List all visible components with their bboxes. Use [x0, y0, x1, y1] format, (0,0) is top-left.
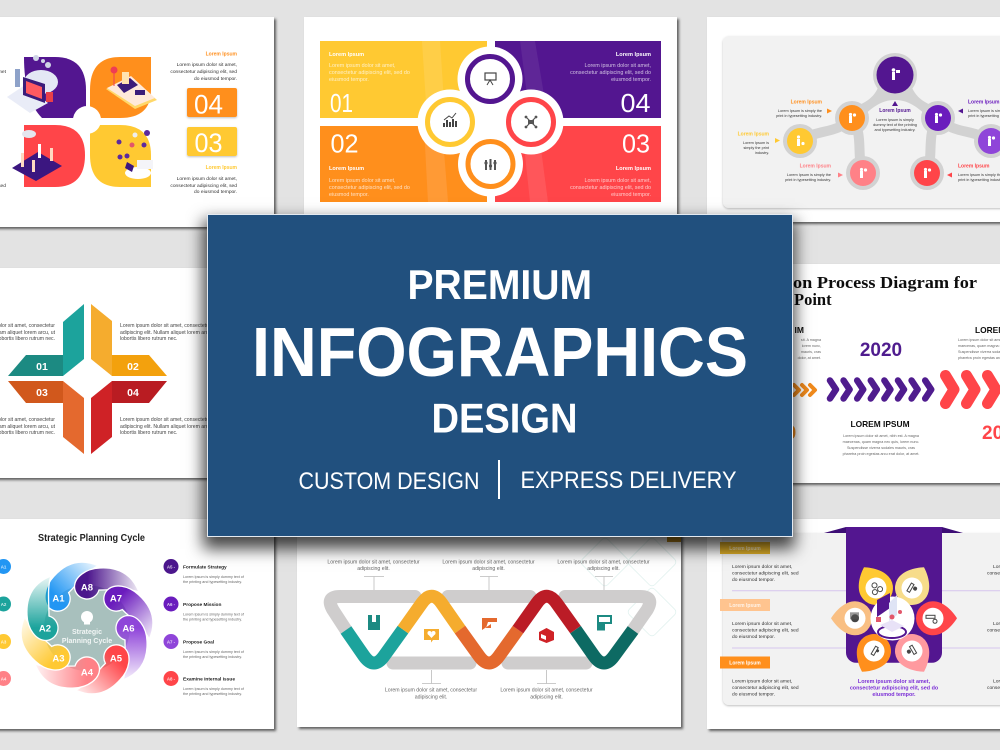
- label: purple: [958, 100, 1000, 118]
- quadrant red: [495, 126, 661, 202]
- label: pink: Lorem Ipsum: [800, 164, 832, 170]
- quadrant red: Lorem ipsum dolor sit amet,: [584, 178, 651, 184]
- node: red: [910, 156, 944, 190]
- year fragments: 20: [775, 423, 796, 444]
- heading: Strategic Planning Cycle: [38, 533, 146, 544]
- list item A8: [164, 671, 245, 696]
- heading top left fragment: lorem nunc,: [802, 344, 821, 348]
- label: pink: Lorem Ipsum is simply the: [787, 173, 831, 177]
- node: top: [873, 53, 917, 97]
- caption: consectetur adipiscing elit, sed do: [850, 686, 939, 692]
- label: gold: [720, 542, 799, 583]
- subheading: custom design: CUSTOM DESIGN: [298, 468, 480, 495]
- card background: [297, 525, 681, 727]
- segment A8: A8: [81, 582, 93, 594]
- label: peach: [720, 599, 799, 640]
- list item A6: A6 -: [167, 602, 176, 607]
- node: yellow: [783, 124, 817, 158]
- label: gold: consectetur adipiscing elit, sed: [732, 570, 799, 576]
- panel: chevron process slide: [740, 264, 1000, 483]
- list item A6: [164, 596, 245, 622]
- orange chevrons: [794, 385, 815, 395]
- list item A6: Lorem Ipsum is simply dummy text of: [183, 612, 245, 616]
- card background: [0, 519, 274, 729]
- text block right bottom: do eiusmod tempor.: [194, 189, 237, 195]
- segment A5: [71, 640, 138, 707]
- clipped list markers: A2: [1, 602, 7, 607]
- quadrant yellow: [320, 41, 487, 118]
- box 04: 04: [194, 90, 223, 120]
- orange leaf with sofa illustration: [90, 57, 157, 118]
- quadrant red: eiusmod tempor.: [611, 192, 651, 198]
- quadrant orange: Lorem ipsum dolor sit amet,: [329, 178, 396, 184]
- heading top left fragment: sit. A magna: [801, 338, 822, 342]
- decorative pale diamonds and corner tab: [580, 537, 681, 637]
- divider: [498, 460, 500, 499]
- clipped list markers: [0, 559, 11, 686]
- leader lines and text bottom 2: adipiscing elit.: [530, 694, 563, 700]
- text top left: [0, 323, 56, 342]
- box 03: [187, 127, 237, 158]
- list item A6: the printing and typesetting industry.: [183, 618, 242, 622]
- quadrant red: consectetur adipiscing elit, sed do: [570, 185, 651, 191]
- label: orange: Lorem Ipsum: [729, 660, 761, 666]
- list item A8: Lorem Ipsum is simply dummy text of: [183, 687, 245, 691]
- quadrant red: 03: [622, 128, 650, 158]
- text block right top: [170, 52, 238, 82]
- connectors: [800, 82, 991, 173]
- leader lines and text top 3: [557, 560, 650, 590]
- label: orange: consectetur adipiscing elit, sed: [732, 685, 799, 691]
- ribbon 04: [91, 381, 167, 454]
- text block right bottom: [170, 165, 238, 195]
- card background: [0, 17, 274, 227]
- leader lines and text bottom 2: Lorem ipsum dolor sit amet, consectetur: [500, 688, 593, 694]
- ring: network icon: [508, 100, 554, 144]
- segment A3: [8, 612, 75, 679]
- heading top left fragment: IM: [795, 325, 804, 335]
- quadrant purple: [495, 41, 661, 118]
- label: yellow: Lorem Ipsum is: [743, 141, 769, 145]
- subheading: express delivery: EXPRESS DELIVERY: [520, 467, 736, 494]
- text bottom left: [0, 417, 56, 436]
- icon: banknote: [597, 615, 612, 630]
- segment A6: A6: [122, 624, 135, 634]
- quadrant orange: eiusmod tempor.: [329, 192, 369, 198]
- leader lines and text bottom 1: Lorem ipsum dolor sit amet, consectetur: [385, 688, 477, 694]
- wheel centre label with head icon: Planning Cycle: [62, 638, 112, 645]
- wheel centre label with head icon: [62, 611, 112, 645]
- purple chevrons: [830, 380, 931, 398]
- label: yellow: [738, 132, 780, 155]
- petal top-right: [889, 559, 939, 611]
- heading top left fragment: dolor, at amet.: [798, 356, 821, 360]
- text top right: Lorem ipsum dolor sit amet, consectetur: [120, 323, 211, 329]
- node: purple: [921, 101, 955, 135]
- red leaf with phone illustration: [12, 125, 85, 187]
- segment A2: [27, 576, 58, 640]
- leader lines and text top 2: [442, 560, 535, 590]
- segment A4: A4: [81, 668, 94, 678]
- inner grey panel: [723, 533, 1000, 705]
- label: orange: [720, 656, 799, 698]
- list item A5: A5 -: [167, 564, 176, 570]
- quadrant red: Lorem Ipsum: [616, 166, 651, 172]
- inner grey panel: [723, 36, 1000, 208]
- label: centre: [873, 101, 917, 132]
- leader lines and text top 1: Lorem ipsum dolor sit amet, consectetur: [327, 560, 420, 566]
- leader lines and text top 2: adipiscing elit.: [472, 566, 505, 572]
- icon: heart bubble: [424, 629, 439, 642]
- list item A6: Propose Mission: [183, 602, 221, 608]
- quadrant purple: eiusmod tempor.: [611, 77, 651, 83]
- text block right top: Lorem ipsum dolor sit amet,: [177, 62, 237, 68]
- card background: [0, 268, 290, 478]
- list item A7: Propose Goal: [183, 640, 214, 646]
- title: Point: [794, 290, 832, 309]
- ring: people icon: [468, 142, 513, 186]
- leader lines and text top 1: adipiscing elit.: [357, 566, 390, 572]
- text top right: [120, 323, 219, 342]
- petal right: [916, 601, 957, 635]
- panel: node tree slide: [707, 17, 1000, 222]
- label: centre: Lorem Ipsum: [879, 108, 911, 114]
- text bottom right: Lorem ipsum dolor sit amet, consectetur: [120, 417, 211, 423]
- label: gold: Lorem Ipsum: [729, 546, 761, 552]
- text block top right: [958, 325, 1000, 360]
- title: [793, 273, 977, 309]
- card background: [740, 264, 1000, 483]
- card background: [707, 519, 1000, 729]
- label: peach: Lorem ipsum dolor sit amet,: [732, 621, 792, 627]
- text block right top: consectetur adipiscing elit, sed: [170, 69, 237, 75]
- panel: strategic planning cycle slide: [0, 519, 274, 729]
- label: yellow: Lorem Ipsum: [738, 132, 770, 138]
- segment A5: A5: [110, 654, 123, 664]
- quadrant yellow: Lorem Ipsum: [329, 52, 364, 58]
- clipped list markers: A3: [1, 640, 7, 644]
- quadrant purple: Lorem Ipsum: [616, 52, 651, 58]
- text bottom right: adipiscing elit. Nullam aliquet lorem arcu, ut: [120, 424, 219, 430]
- centre isometric illustration: [870, 593, 914, 640]
- text bottom right: [120, 417, 219, 436]
- segment A8: [74, 568, 139, 599]
- label: orange: print in typesetting industry.: [776, 114, 822, 118]
- list item A7: the printing and typesetting industry.: [183, 655, 242, 659]
- text block lorem ipsum: Suspendisse viverra sodales mauris, cras: [847, 446, 915, 450]
- panel: zigzag chain slide: [297, 525, 681, 727]
- panel: four quadrants slide: [304, 17, 677, 222]
- grey links: [330, 596, 650, 663]
- text bottom right: lobortis libero rutrum nec.: [120, 430, 177, 436]
- list item A5: the printing and typesetting industry.: [183, 580, 242, 584]
- label: gold: do eiusmod tempor.: [732, 577, 775, 583]
- card background: [304, 17, 677, 222]
- label: pink: [785, 164, 843, 182]
- node: pink: [846, 156, 880, 190]
- leader lines and text top 3: Lorem ipsum dolor sit amet, consectetur: [557, 560, 650, 566]
- ribbon: [824, 527, 963, 663]
- heading: design: DESIGN: [432, 394, 578, 442]
- quadrant purple: consectetur adipiscing elit, sed do: [570, 70, 651, 76]
- quadrant orange: [320, 126, 487, 202]
- clipped left text: [0, 69, 7, 189]
- heading: premium: PREMIUM: [408, 261, 592, 308]
- text block right bottom: consectetur adipiscing elit, sed: [170, 183, 237, 189]
- label: yellow: simply the print: [743, 146, 770, 150]
- text block right bottom: Lorem ipsum dolor sit amet,: [177, 176, 237, 182]
- text block lorem ipsum: pharetra proin egestas arcu erat dolor, at amet.: [843, 452, 919, 456]
- label: orange: Lorem Ipsum is simply the: [778, 109, 822, 113]
- node: orange: [835, 101, 869, 135]
- text block lorem ipsum: maecenas, quam magna nec quis, lorem nunc.: [843, 440, 919, 444]
- label: orange: [776, 100, 832, 118]
- icon: book: [368, 615, 380, 630]
- panel: four-leaf slide: [0, 17, 274, 227]
- ribbon 01: 01: [36, 361, 48, 373]
- petal top-left: [849, 559, 899, 611]
- label: centre: Lorem Ipsum is simply: [876, 118, 914, 122]
- label: centre: and typesetting industry.: [875, 128, 915, 132]
- purple leaf with cloud illustration: [7, 55, 86, 118]
- leader lines and text bottom 2: [500, 670, 593, 700]
- central white cross: [418, 46, 564, 196]
- year 2020: 2020: [860, 340, 902, 361]
- leader lines and text top 1: [327, 560, 420, 590]
- list item A5: Formulate Strategy: [183, 564, 227, 570]
- segment A7: A7: [110, 594, 122, 604]
- yellow leaf with people illustration: [90, 125, 153, 187]
- text block lorem ipsum: Lorem ipsum dolor sit amet, nibh est. A magna: [843, 434, 920, 438]
- caption: Lorem ipsum dolor sit amet,: [858, 679, 931, 685]
- list item A8: Examine Internal Issue: [183, 676, 235, 682]
- clipped list markers: A1: [1, 564, 7, 570]
- heading top left fragment: [795, 325, 822, 360]
- quadrant yellow: 01: [330, 88, 353, 118]
- central title banner: [207, 214, 793, 537]
- label: orange: Lorem Ipsum: [791, 100, 823, 106]
- segment A1: [36, 549, 103, 616]
- segment A2: A2: [39, 624, 51, 634]
- wheel centre: [44, 585, 130, 671]
- list item A7: A7 -: [167, 640, 176, 644]
- quadrant yellow: eiusmod tempor.: [329, 77, 369, 83]
- text top right: lobortis libero rutrum nec.: [120, 336, 177, 342]
- label: orange: Lorem ipsum dolor sit amet,: [732, 678, 792, 684]
- segment A1: A1: [52, 594, 65, 604]
- petal lower-right: [889, 628, 939, 680]
- node: light purple: [974, 124, 1000, 158]
- petal lower-left: [847, 628, 897, 680]
- clipped right text: [987, 564, 1000, 691]
- ribbon 01: [8, 304, 84, 376]
- heading: infographics: INFOGRAPHICS: [252, 313, 748, 391]
- icon: handshake: [482, 618, 497, 630]
- caption: eiusmod tempor.: [872, 692, 916, 698]
- red chevrons: [946, 376, 996, 404]
- zigzag band: [346, 596, 633, 663]
- list item A7: [164, 634, 245, 659]
- text block right top: do eiusmod tempor.: [194, 76, 237, 82]
- centre hole: [73, 106, 101, 134]
- ribbon 04: 04: [127, 387, 139, 399]
- ring: chart icon: [428, 100, 472, 144]
- quadrant purple: 04: [620, 88, 650, 118]
- divider lines: [732, 591, 1000, 648]
- caption: [850, 679, 939, 698]
- quadrant yellow: consectetur adipiscing elit, sed do: [329, 70, 410, 76]
- label: red: Lorem Ipsum: [958, 164, 990, 170]
- heading top left fragment: mauris, cras: [801, 350, 821, 354]
- text block right top: Lorem Ipsum: [206, 52, 238, 58]
- text block right bottom: Lorem Ipsum: [206, 165, 238, 171]
- panel: petal flower slide: [707, 519, 1000, 729]
- list item A8: the printing and typesetting industry.: [183, 692, 242, 696]
- label: centre: dummy text of the printing: [873, 123, 917, 127]
- quadrant orange: consectetur adipiscing elit, sed do: [329, 185, 410, 191]
- text block lorem ipsum: LOREM IPSUM: [850, 419, 910, 429]
- banner border: [208, 214, 792, 536]
- label: peach: consectetur adipiscing elit, sed: [732, 628, 799, 634]
- label: peach: do eiusmod tempor.: [732, 634, 775, 640]
- quadrant orange: Lorem Ipsum: [329, 166, 364, 172]
- segment A3: A3: [52, 654, 65, 664]
- list item A8: A8 -: [167, 676, 176, 682]
- leader lines and text top 2: Lorem ipsum dolor sit amet, consectetur: [442, 560, 535, 566]
- wheel centre label with head icon: Strategic: [72, 629, 102, 636]
- leader lines and text bottom 1: [385, 670, 477, 700]
- ring: presentation icon: [468, 56, 512, 102]
- label: red: [947, 164, 1000, 182]
- segment A6: [116, 616, 147, 680]
- ribbon 03: 03: [36, 387, 48, 399]
- label: orange: do eiusmod tempor.: [732, 692, 775, 698]
- leader lines and text bottom 1: adipiscing elit.: [415, 694, 447, 700]
- list item A5: [164, 559, 245, 584]
- quadrant orange: 02: [330, 128, 358, 158]
- card background: [707, 17, 1000, 222]
- text block lorem ipsum: [843, 419, 920, 456]
- list item A7: Lorem Ipsum is simply dummy text of: [183, 650, 245, 654]
- clipped list markers: A4: [1, 676, 7, 682]
- text top right: adipiscing elit. Nullam aliquet lorem arcu, ut: [120, 330, 219, 336]
- quadrant yellow: Lorem ipsum dolor sit amet,: [329, 63, 396, 69]
- box 04: [187, 88, 237, 120]
- ribbon 02: [91, 304, 167, 376]
- label: peach: Lorem Ipsum: [729, 603, 761, 609]
- icon: red box: [539, 628, 554, 643]
- ribbon 02: 02: [127, 361, 139, 373]
- label: pink: print in typesetting industry.: [785, 178, 831, 182]
- label: yellow: industry.: [755, 151, 769, 155]
- petal left: [831, 601, 872, 635]
- segment A7: [99, 577, 166, 644]
- leader lines and text top 3: adipiscing elit.: [587, 566, 620, 572]
- year fragments: [775, 423, 1000, 444]
- label: purple: Lorem Ipsum: [968, 100, 1000, 106]
- ribbon 03: [8, 381, 84, 454]
- title: on Process Diagram for: [793, 273, 977, 292]
- panel: ribbon cross slide: [0, 268, 290, 478]
- box 03: 03: [194, 128, 222, 158]
- quadrant purple: Lorem ipsum dolor sit amet,: [584, 63, 651, 69]
- segment A4: [35, 657, 100, 688]
- list item A5: Lorem Ipsum is simply dummy text of: [183, 575, 245, 579]
- label: gold: Lorem ipsum dolor sit amet,: [732, 564, 792, 570]
